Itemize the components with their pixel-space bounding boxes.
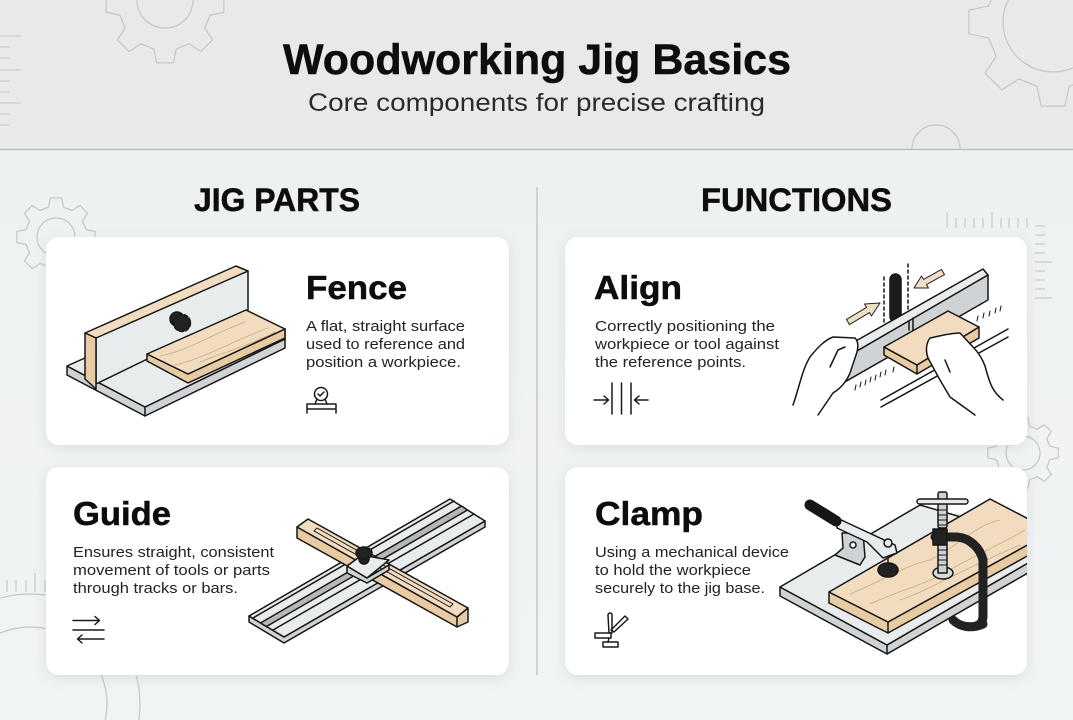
text: align description: the reference points.: [595, 354, 746, 371]
icon: two-way arrows: [73, 616, 104, 643]
icon: align arrows: [594, 383, 648, 414]
panel: align: [565, 237, 1027, 445]
panel: clamp: [565, 467, 1040, 675]
heading: functions: FUNCTIONS: [701, 182, 892, 218]
page background: [0, 150, 1073, 720]
center divider: [536, 187, 538, 675]
subtitle: Core components for precise crafting: [308, 89, 765, 117]
text: fence description: [306, 318, 465, 371]
text: guide description: movement of tools or parts: [73, 562, 270, 579]
icon: toggle clamp: [595, 613, 628, 647]
heading: guide: Guide: [73, 495, 171, 532]
title: Woodworking Jig Basics: [283, 36, 791, 84]
text: guide description: through tracks or bars.: [73, 580, 238, 597]
heading: clamp: Clamp: [595, 495, 703, 532]
heading: jig parts: JIG PARTS: [194, 182, 360, 218]
header band: [0, 0, 1073, 150]
icon: gauge on base: [307, 388, 336, 413]
text: align description: workpiece or tool against: [594, 336, 780, 353]
text: align description: Correctly positioning the: [595, 318, 775, 335]
text: align description: [594, 318, 780, 371]
background decorations: [0, 198, 1058, 720]
text: clamp description: Using a mechanical device: [595, 544, 789, 561]
illustration: guide rail: [249, 499, 485, 643]
text: fence description: used to reference and: [306, 336, 465, 353]
illustration: clamps on workpiece: [780, 492, 1040, 654]
heading: fence: Fence: [306, 269, 407, 306]
text: guide description: [73, 544, 275, 597]
panel: guide: [46, 467, 509, 675]
text: clamp description: [595, 544, 789, 597]
heading: align: Align: [594, 269, 682, 306]
illustration: fence jig: [67, 266, 285, 416]
text: clamp description: to hold the workpiece: [595, 562, 751, 579]
text: guide description: Ensures straight, consistent: [73, 544, 275, 561]
panel: fence: [46, 237, 509, 445]
text: fence description: A flat, straight surface: [306, 318, 465, 335]
text: clamp description: securely to the jig base.: [595, 580, 765, 597]
illustration: aligning workpiece: [793, 264, 1008, 415]
text: fence description: position a workpiece.: [306, 354, 461, 371]
